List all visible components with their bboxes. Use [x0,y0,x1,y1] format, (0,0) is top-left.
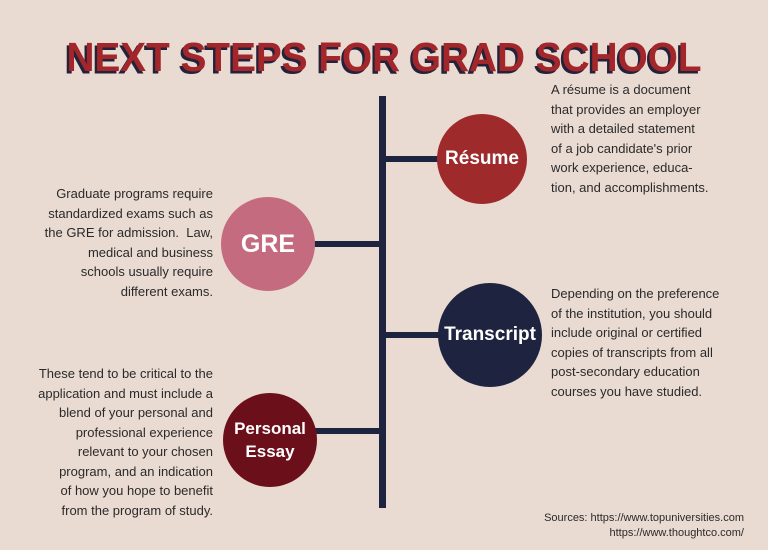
sources: Sources: https://www.topuniversities.com [544,512,744,524]
text: personal essay: application and must include a [38,386,213,400]
text: resume [551,82,709,194]
text: GRE [44,186,213,298]
circle: personal essay: Essay [245,442,295,461]
circle: transcript [438,283,542,387]
text: resume: work experience, educa- [551,160,693,175]
text: resume: that provides an employer [551,102,701,116]
text: personal essay: These tend to be critical to the [39,366,213,381]
text: transcript: include original or certified [551,325,702,340]
text: personal essay: program, and an indication [59,464,213,478]
text: personal essay: relevant to your chosen [78,444,213,459]
text: personal essay: of how you hope to benefit [60,483,213,498]
branch: GRE [312,241,382,247]
text: resume: tion, and accomplishments. [551,180,709,194]
text: resume: of a job candidate's prior [551,140,692,156]
text: GRE: schools usually require [81,264,213,279]
timeline spine [379,96,386,508]
text: GRE: Graduate programs require [56,186,213,201]
branch: resume [385,156,440,162]
text: transcript: of the institution, you should [551,306,712,320]
text: GRE: standardized exams such as [48,206,213,220]
text: GRE: the GRE for admission. Law, [45,225,213,240]
circle: personal essay: Personal [234,419,306,438]
sources [544,512,744,539]
text: personal essay: professional experience [76,424,213,440]
text: resume: with a detailed statement [551,121,695,136]
text: personal essay: from the program of study. [62,502,213,518]
circle: resume: Résume [445,148,519,169]
text: transcript: Depending on the preference [551,286,719,301]
circle: GRE [221,197,315,291]
circle: personal essay [223,393,317,487]
text: GRE: medical and business [88,244,213,260]
branch: transcript [385,332,445,338]
text: resume: A résume is a document [551,82,690,97]
text: transcript [551,286,719,398]
text: personal essay [38,366,213,518]
title: NEXT STEPS FOR GRAD SCHOOL [66,34,702,80]
text: GRE: different exams. [121,284,213,298]
text: transcript: copies of transcripts from all [551,344,713,360]
circle: GRE: GRE [241,230,295,258]
text: transcript: courses you have studied. [551,384,702,398]
text: personal essay: blend of your personal and [59,405,213,420]
circle: resume [437,114,527,204]
circle: transcript: Transcript [444,324,536,345]
text: transcript: post-secondary education [551,364,700,379]
branch: essay [312,428,382,434]
sources: https://www.thoughtco.com/ [609,527,744,539]
